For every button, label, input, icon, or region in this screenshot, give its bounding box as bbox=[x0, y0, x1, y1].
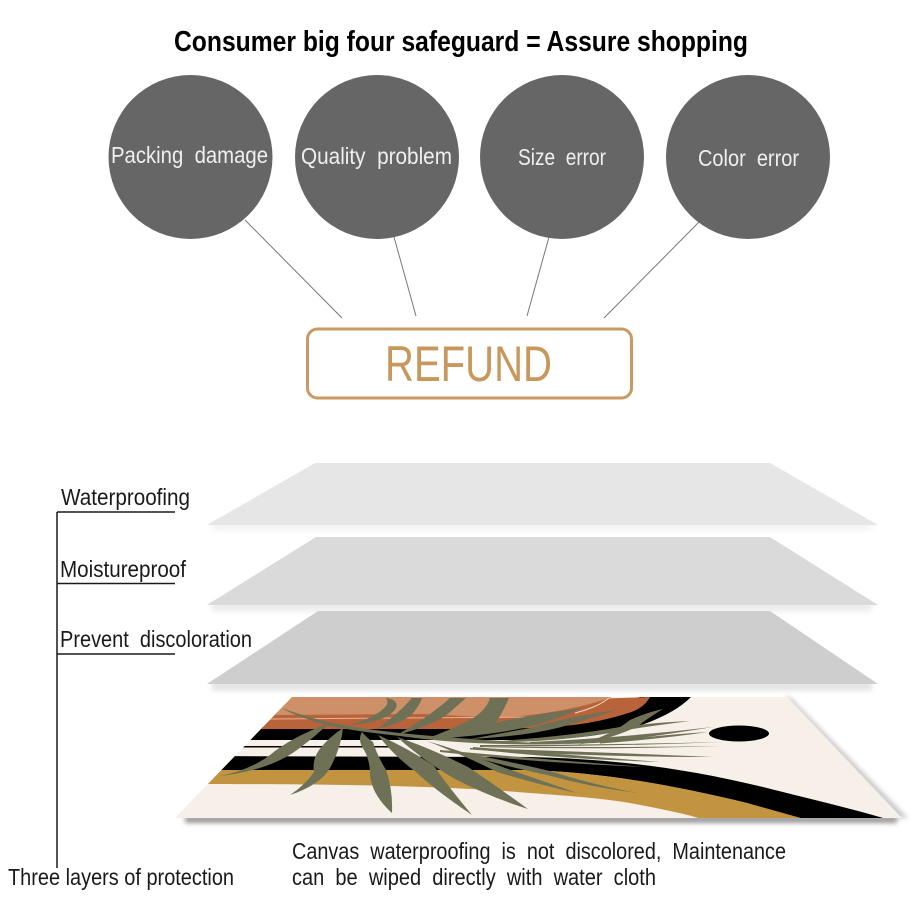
canvas artwork bbox=[175, 697, 908, 823]
caption: can be wiped directly with water cloth bbox=[292, 864, 656, 890]
refund box: REFUND bbox=[385, 336, 552, 392]
thin black line bbox=[240, 746, 390, 748]
layer 2: moistureproof sheet bbox=[207, 537, 878, 611]
circle: color error: Color error bbox=[698, 145, 799, 171]
label: prevent discoloration: Prevent discoloration bbox=[60, 626, 252, 652]
upper black arc bbox=[240, 697, 691, 740]
peach panel bbox=[270, 697, 612, 718]
connector lines from circles to refund bbox=[245, 220, 700, 318]
rust arc bbox=[250, 697, 650, 729]
circle: quality problem bbox=[295, 75, 459, 239]
caption: Canvas waterproofing is not discolored, Maintenance bbox=[292, 838, 786, 864]
title: Consumer big four safeguard = Assure shopping bbox=[174, 26, 748, 58]
circle: color error bbox=[666, 75, 830, 239]
bracket lines bbox=[57, 512, 175, 868]
label: three layers of protection: Three layers of protection bbox=[8, 864, 234, 890]
circle: size error bbox=[480, 75, 644, 239]
label: moistureproof: Moistureproof bbox=[60, 556, 187, 582]
large black arc bbox=[180, 756, 890, 820]
gold band bbox=[180, 770, 808, 820]
layer 3: discoloration sheet bbox=[207, 611, 878, 690]
circle: packing damage: Packing damage bbox=[111, 142, 268, 168]
circle: size error: Size error bbox=[518, 144, 606, 170]
refund box bbox=[308, 329, 632, 398]
circle: packing damage bbox=[108, 75, 272, 239]
caption bbox=[292, 838, 786, 890]
black dot bbox=[709, 726, 769, 742]
layer 1: waterproofing sheet bbox=[207, 463, 878, 530]
label: waterproofing: Waterproofing bbox=[61, 484, 190, 510]
palm leaf bbox=[220, 698, 723, 815]
circle: quality problem: Quality problem bbox=[301, 143, 452, 169]
